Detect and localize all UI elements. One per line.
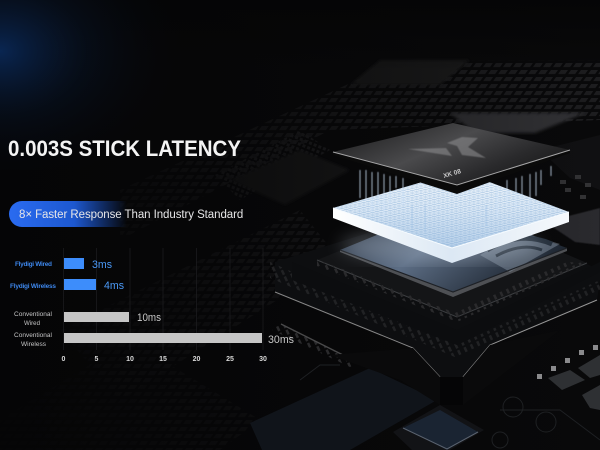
chip marking: XK 08 xyxy=(443,168,462,180)
faint streams over slab xyxy=(412,205,486,232)
x axis labels: 25 xyxy=(226,356,234,363)
x axis labels: 20 xyxy=(193,356,200,363)
bar: Flydigi Wired 3ms: 3ms xyxy=(92,259,112,271)
bar: Flydigi Wireless 4ms: 4ms xyxy=(104,280,124,292)
data streams between chips xyxy=(360,166,551,218)
bar: Conventional Wired 10ms: Conventional xyxy=(14,311,53,318)
x axis labels: 15 xyxy=(159,356,167,363)
bar: Flydigi Wired 3ms: Flydigi Wired xyxy=(15,261,52,268)
glow under slab xyxy=(340,227,540,263)
x axis labels: 5 xyxy=(95,356,99,363)
bar: Conventional Wired 10ms: 10ms xyxy=(137,312,161,324)
x axis labels: 10 xyxy=(126,356,134,363)
x axis labels xyxy=(62,356,267,363)
bar: Conventional Wireless 30ms: Conventional xyxy=(14,332,53,339)
bar: Flydigi Wired 3ms xyxy=(15,258,112,271)
bar: Conventional Wireless 30ms: 30ms xyxy=(268,334,294,346)
title: 0.003S STICK LATENCY xyxy=(8,136,241,161)
lower chip xyxy=(340,205,567,297)
lower circuit board xyxy=(250,323,600,450)
bar: Conventional Wired 10ms xyxy=(14,311,161,327)
bar: Flydigi Wireless 4ms xyxy=(10,279,124,292)
bar: Conventional Wireless 30ms xyxy=(14,332,294,348)
x axis labels: 0 xyxy=(62,356,66,363)
bar: Flydigi Wireless 4ms: Flydigi Wireless xyxy=(10,283,56,290)
x axis labels: 30 xyxy=(259,356,267,363)
bar: Conventional Wired 10ms: Wired xyxy=(24,320,40,327)
white lattice slab xyxy=(333,171,569,263)
top chip xyxy=(333,123,570,194)
response pill xyxy=(9,201,127,227)
chip base xyxy=(270,205,600,405)
response headline: 8× Faster Response Than Industry Standard xyxy=(19,209,243,221)
logo on top chip xyxy=(408,137,486,158)
bar: Conventional Wireless 30ms: Wireless xyxy=(21,341,47,348)
